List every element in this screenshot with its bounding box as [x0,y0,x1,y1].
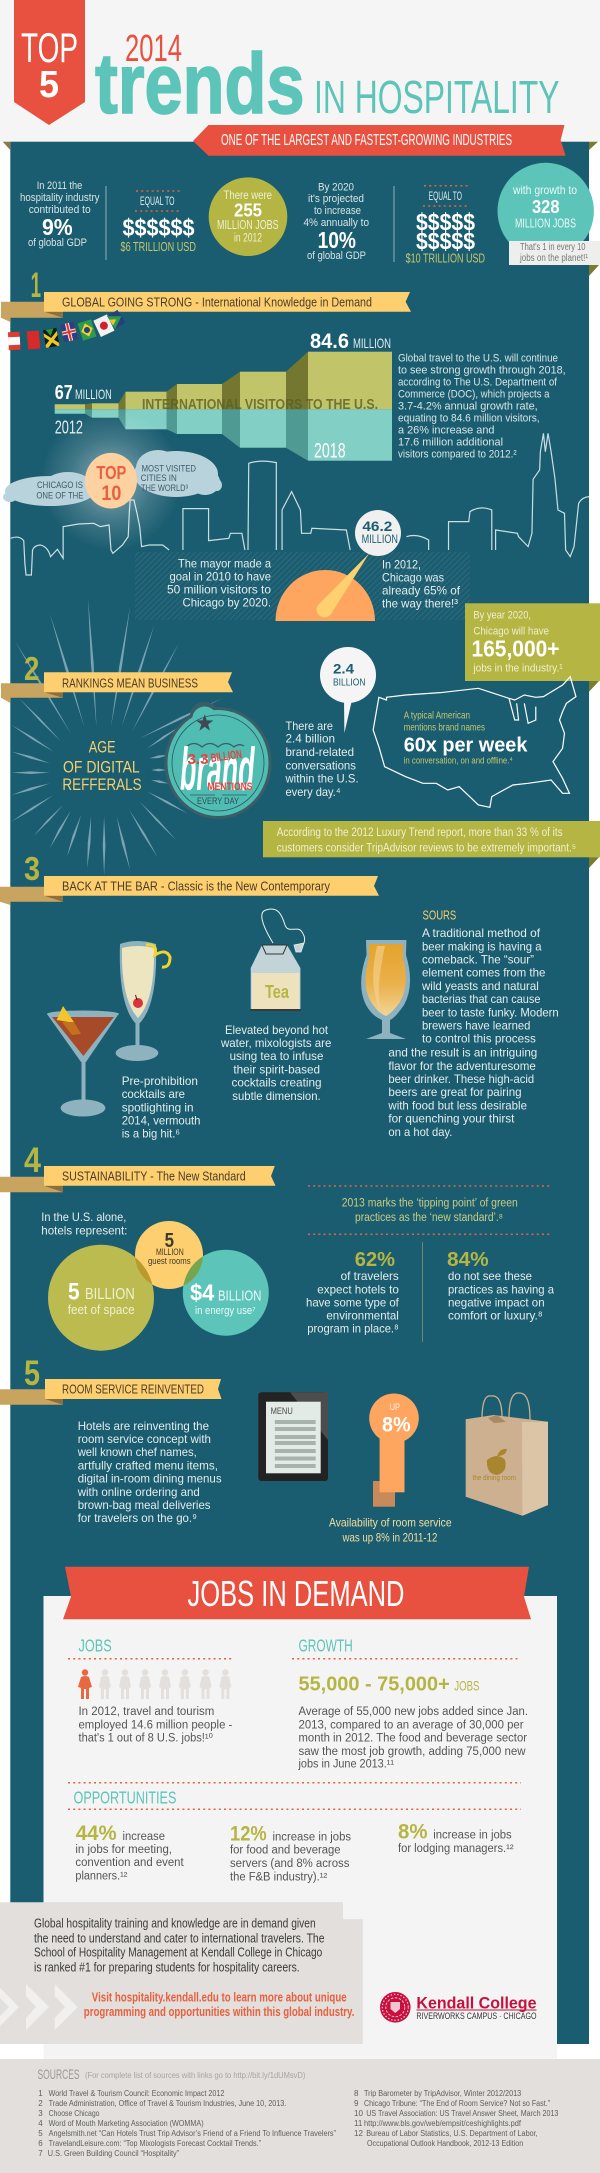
text block: room service [77,1419,222,1525]
text block: room service: Hotels are reinventing the [78,1419,209,1433]
text block: pre-prohibition cocktails: cocktails are [122,1087,185,1101]
sources list: right column: US Travel Association: US Travel Answer Sheet, March 2013 [366,2109,559,2118]
text block: global travel: Global travel to the U.S. will continue [398,353,558,365]
sources list: right column: 10 [354,2109,363,2118]
venn circles: hotel footprint: feet of space [68,1303,135,1317]
stat circle: 255 million jobs: MILLION JOBS [217,218,279,232]
text block: tea: cocktails creating [232,1076,322,1090]
stat: 62 percent [306,1249,399,1336]
text block: tea: water, mixologists are [220,1036,332,1050]
stat: 44 percent: convention and event [75,1857,184,1869]
stat: 9 percent of global GDP: 9% [42,214,73,240]
icon: people row, 1 of 8 [78,1669,231,1699]
callout: 165,000 jobs: jobs in the industry.¹ [472,663,563,675]
stat: 10 trillion USD: EQUAL TO [429,189,462,203]
badge: 3.3 billion brand mentions: EVERY DAY [197,796,239,806]
section 4 heading ribbon: 4 [24,1141,41,1180]
text block: tea: their spirit-based [233,1062,320,1076]
section 2 heading ribbon [1,650,233,703]
section 5 heading ribbon: 5 [24,1354,40,1393]
chart: international visitors to the U.S.: 84.6 [310,330,349,353]
text block: brand conversations: brand-related [286,745,354,759]
venn circles: hotel footprint [48,1221,269,1351]
sources list: left column: Angelsmith.net “Can Hotels Trust Trip Advisor’s Friend of a Friend To Influence Travelers” [49,2129,336,2138]
panel: growth: Average of 55,000 new jobs added since Jan. [298,1706,528,1718]
callout: 165,000 jobs [465,603,600,692]
text block: sours: beers are great for pairing [388,1085,522,1099]
stat circle: 255 million jobs [209,177,287,256]
text block: brand conversations [285,719,359,799]
text block: pre-prohibition cocktails: 2014, vermouth [122,1114,200,1128]
text block: room service: brown-bag meal deliveries [78,1498,210,1512]
callout: Chicago top 10 cities: CITIES IN [141,473,177,483]
badge: 3.3 billion brand mentions: MENTIONS [208,781,252,793]
text block: sours: flavor for the adventuresome [388,1059,536,1073]
venn circles: hotel footprint: 5 [68,1278,80,1305]
gauge: 46.2 million visitors: 46.2 [362,519,392,534]
text: availability of room service: was up 8% in 2011-12 [342,1531,438,1545]
stat: 44 percent [75,1822,184,1882]
stat: 62 percent: environmental [326,1309,399,1323]
callout: tipping point of green practices [308,1186,551,1234]
stat: 12 percent: for food and beverage [230,1845,341,1857]
icon: tea bag [250,909,305,1011]
stat: 12 percent [230,1823,351,1883]
panel: opportunities [68,1783,521,1883]
stat: 84 percent: comfort or luxury.⁸ [448,1309,543,1323]
section 1 heading ribbon: 1 [31,266,41,305]
callout: tipping point of green practices: practices as the ‘new standard’.⁸ [355,1212,503,1224]
text block: pre-prohibition cocktails: Pre-prohibition [122,1074,198,1088]
sources list: left column: 6 [38,2139,43,2148]
text block: mayor goal: 50 million visitors to [167,583,271,597]
badge: 3.3 billion brand mentions: brand [180,736,255,803]
stat: 84 percent: 84% [447,1249,489,1271]
sources list: right column: 9 [354,2099,359,2108]
panel: sources: SOURCES [38,2066,80,2082]
text block: brand conversations: every day.⁴ [286,785,341,799]
panel: growth: 55,000 - 75,000+ [298,1674,450,1696]
stat: 8 percent: increase in jobs [433,1829,512,1841]
text block: hotels represent: hotels represent: [41,1223,127,1237]
icon: tablet menu: MENU [271,1406,293,1417]
icon: key tag up 8 percent [369,1394,419,1507]
callout: 60x per week: 60x per week [404,735,528,757]
section 2 heading ribbon: 2 [24,650,39,687]
stat: 62 percent: expect hotels to [317,1282,399,1296]
text block: sours: beer drinker. These high-acid [388,1072,534,1086]
stat: 10 trillion USD: $10 TRILLION USD [406,252,485,266]
text block: global travel: Commerce (DOC), which projects a [398,389,550,401]
text block: mayor goal [167,557,271,610]
panel: jobs: JOBS [78,1636,112,1656]
stat: 84 percent: practices as having a [448,1282,554,1296]
text block: room service: artfully crafted menu items, [78,1458,218,1472]
title [95,28,560,132]
section 3 heading ribbon [0,850,379,905]
icon: champagne flute [116,941,170,1061]
fold triangles [3,142,598,150]
text: availability of room service: Availability of room service [329,1516,452,1530]
stat: 9 percent of global GDP: of global GDP [28,237,87,249]
stat: 44 percent: 44% [76,1822,117,1845]
stat circle: 328 million jobs: with growth to [512,183,577,197]
stat: 6 trillion USD [120,191,196,254]
callout: Chicago top 10 cities: CHICAGO IS [37,480,83,490]
text block: global travel: according to The U.S. Department of [398,377,558,389]
stat: 44 percent: planners.¹² [75,1870,128,1882]
callout: Chicago top 10 cities [3,410,222,550]
stat: 10 trillion USD [406,186,485,266]
chart: international visitors to the U.S.: MILLION [75,386,112,402]
callout: Chicago top 10 cities: MOST VISITED [142,464,196,474]
header ribbon: top 5: TOP [21,24,78,71]
icon: flags [8,310,125,350]
icon: tablet menu [258,1392,328,1481]
text block: global travel: to see strong growth through 2018, [398,365,566,377]
text block: sours: element comes from the [422,966,546,980]
chart: international visitors to the U.S.: 2012 [55,416,83,437]
stat: 84 percent: negative impact on [448,1296,545,1310]
sources list: right column: 8 [354,2089,359,2098]
text block: global travel: equating to 84.6 million visitors, [398,413,540,425]
panel: growth: month in 2012. The food and beverage sector [298,1733,527,1745]
icon: key tag up 8 percent: 8% [382,1414,411,1437]
section 2 heading ribbon: RANKINGS MEAN BUSINESS [62,676,198,691]
text block: sours: comeback. The “sour” [422,952,534,966]
text block: tea: Elevated beyond hot [225,1023,329,1037]
map: United States outline [373,677,576,807]
sources list: left column: Word of Mouth Marketing Association (WOMMA) [49,2119,204,2128]
stat circle: 328 million jobs: MILLION JOBS [515,217,576,231]
text block: sours: to control this process [422,1032,536,1046]
sources list: right column: Chicago Tribune: “The End of Room Service? Not so Fast.” [364,2099,550,2108]
text block: 65 percent of the way: In 2012, [382,557,421,571]
banner: jobs in demand [63,1567,531,1619]
gauge: 46.2 million visitors [276,510,401,621]
stat: 12 percent: servers (and 8% across [230,1858,350,1870]
text block: global travel [398,353,566,461]
panel: sources [0,2059,600,2173]
text block: brand conversations: within the U.S. [285,772,359,786]
stat: 10 percent of global GDP: By 2020 [318,181,354,193]
text block: room service: with online ordering and [77,1485,200,1499]
callout: Chicago top 10 cities: TOP [96,462,126,483]
callout: 60x per week: in conversation, on and offline.⁴ [404,755,513,766]
text block: 65 percent of the way: already 65% of [382,583,461,597]
icon: beer glass [361,940,410,1039]
text block: room service: room service concept with [78,1432,211,1446]
sources list: left column: 7 [38,2149,43,2158]
stat: 10 percent of global GDP: it's projected [308,193,364,205]
stat: 12 percent: 12% [230,1823,267,1846]
skyline illustration [11,433,589,575]
stat circle: 255 million jobs: There were [224,188,272,202]
panel: growth [292,1636,528,1771]
text block: pre-prohibition cocktails: spotlighting in [122,1100,194,1114]
panel: growth: JOBS [454,1678,480,1694]
panel: growth: GROWTH [298,1636,353,1656]
section 3 heading ribbon: 3 [24,850,40,887]
venn circles: hotel footprint: $4 [190,1280,214,1306]
venn circles: hotel footprint: BILLION [218,1288,261,1305]
card: jobs in demand background [44,1596,557,2059]
text block: 65 percent of the way: the way there!³ [382,597,458,611]
panel: Kendall College call to action: programming and opportunities within this global industry. [84,2005,354,2019]
hatch band [135,552,470,620]
heading: age of digital referrals [62,738,142,794]
panel: sources: (For complete list of sources with links go to http://bit.ly/1dUMsvD) [85,2070,306,2080]
panel: growth: saw the most job growth, adding 75,000 new [298,1746,526,1758]
stat: 62 percent: of travelers [341,1269,399,1283]
text: availability of room service [329,1516,452,1545]
stat: 10 trillion USD: $$$$$ [416,228,476,255]
badge: 3.3 billion brand mentions: 3.3 [188,751,208,768]
callout: tipping point of green practices: 2013 marks the ‘tipping point’ of green [342,1198,518,1210]
stat circle: 255 million jobs: 255 [234,200,262,221]
stat: 10 percent of global GDP [304,181,369,262]
panel: jobs: that's 1 out of 8 U.S. jobs!¹⁰ [78,1733,213,1745]
logo: Kendall College: RIVERWORKS CAMPUS · CHICAGO [416,2011,536,2021]
text block: global travel: 17.6 million additional [398,437,503,449]
sunburst rays [11,598,222,875]
text block: sours [387,907,559,1139]
panel: jobs: In 2012, travel and tourism [78,1706,214,1718]
stat: 9 percent of global GDP: contributed to [29,204,91,216]
icon: key tag up 8 percent: UP [390,1402,400,1413]
text block: sours: beer making is having a [422,939,542,953]
text block: global travel: a 26% increase and [398,425,494,437]
bubble: 2.4 billion: 2.4 [333,660,354,676]
icon: tea bag: Tea [265,982,290,1002]
sources list: left column: Choose Chicago [49,2109,100,2118]
text block: tea: using tea to infuse [230,1049,324,1063]
callout: 165,000 jobs: 165,000+ [472,636,560,662]
stat circle: 255 million jobs: in 2012 [234,233,262,245]
stat: 62 percent: program in place.⁸ [307,1322,399,1336]
sources list: right column [354,2089,559,2148]
text block: mayor goal: goal in 2010 to have [170,570,271,584]
stat: 12 percent: the F&B industry).¹² [230,1871,327,1883]
stat: 10 percent of global GDP: to increase [314,205,361,217]
sources list: left column: Trade Administration, Office of Travel & Tourism Industries, June 10, 2013. [49,2099,286,2108]
panel: Kendall College call to action: Global hospitality training and knowledge are in demand given [34,1917,316,1931]
banner: jobs in demand: JOBS IN DEMAND [188,1573,404,1614]
text block: tea: subtle dimension. [232,1089,321,1103]
panel: Kendall College call to action: Visit hospitality.kendall.edu to learn more about unique [92,1991,347,2005]
stat: 9 percent of global GDP [20,180,100,249]
text block: hotels represent [41,1210,127,1237]
badge: 3.3 billion brand mentions: BILLION [210,747,243,765]
text block: sours: wild yeasts and natural [421,979,539,993]
callout: TripAdvisor reviews: According to the 2012 Luxury Trend report, more than 33 % of its [277,827,563,839]
section 5 heading ribbon [0,1354,222,1405]
chart: international visitors to the U.S.: 2018 [314,440,346,463]
stat: 6 trillion USD: $6 TRILLION USD [120,240,196,254]
text block: sours: on a hot day. [388,1125,452,1139]
icon: paper bag [466,1393,548,1516]
sources list: left column: 1 [38,2089,43,2098]
stat: 44 percent: in jobs for meeting, [75,1844,172,1856]
panel: Kendall College call to action: is ranked #1 for preparing students for hospitality careers. [34,1960,300,1974]
text block: sours: SOURS [422,907,456,922]
subtitle banner [193,125,566,156]
panel: opportunities: OPPORTUNITIES [74,1787,176,1807]
text block: tea [220,1023,332,1103]
heading: age of digital referrals: OF DIGITAL [63,757,140,776]
text block: pre-prohibition cocktails [122,1074,200,1141]
stat: 9 percent of global GDP: hospitality industry [20,192,100,204]
stat circle: 328 million jobs: 328 [532,196,560,217]
logo: Kendall College: Kendall College [416,1994,536,2012]
sources list: left column: 3 [38,2109,43,2118]
panel: jobs: employed 14.6 million people - [78,1719,232,1731]
text block: sours: A traditional method of [422,926,541,940]
panel: Kendall College call to action: School of Hospitality Management at Kendall College in Chicago [34,1946,322,1960]
sources list: right column: 11 [354,2119,363,2128]
stat: 10 percent of global GDP: 10% [318,227,356,253]
text block: sours: bacterias that can cause [422,992,541,1006]
sources list: left column: TravelandLeisure.com: “Top Mixologists Forecast Cocktail Trends.” [49,2139,261,2148]
callout: 165,000 jobs: By year 2020, [473,609,531,621]
callout: Chicago top 10 cities: 10 [101,482,121,505]
stat: 12 percent: increase in jobs [272,1832,351,1844]
text block: brand conversations: 2.4 billion [286,732,335,746]
stat: 8 percent: for lodging managers.¹² [398,1843,514,1855]
sources list: left column: U.S. Green Building Council “Hospitality” [48,2149,179,2158]
bubble: 2.4 billion: BILLION [333,677,366,689]
stat: 10 percent of global GDP: of global GDP [307,250,366,262]
chart: international visitors to the U.S.: 67 [55,382,73,404]
text block: sours: beer to taste funky. Modern [422,1005,559,1019]
panel: Kendall College call to action: the need to understand and cater to international travelers. The [34,1931,325,1945]
section 5 heading ribbon: ROOM SERVICE REINVENTED [62,1381,204,1396]
sources list: right column: Trip Barometer by TripAdvisor, Winter 2012/2013 [364,2089,522,2098]
panel: growth: jobs in June 2013.¹¹ [298,1759,394,1771]
sources list: right column: Occupational Outlook Handbook, 2012-13 Edition [367,2139,523,2148]
callout: 60x per week: A typical American [404,711,470,722]
stat: 8 percent [398,1820,514,1855]
chart: international visitors to the U.S.: INTERNATIONAL VISITORS TO THE U.S. [142,397,378,413]
header ribbon: top 5 [14,0,85,125]
sources list: left column: 5 [38,2129,43,2138]
logo: Kendall College [380,1992,536,2023]
callout: Chicago top 10 cities: ONE OF THE [36,490,83,500]
sources list: right column: Bureau of Labor Statistics, U.S. Department of Labor, [366,2129,538,2138]
stat: 84 percent: do not see these [448,1269,532,1283]
text block: sours: for quenching your thirst [388,1112,515,1126]
sources list: right column: http://www.bls.gov/web/empsit/ceshighlights.pdf [364,2119,522,2128]
stat: 62 percent: have some type of [306,1296,399,1310]
text block: sours: brewers have learned [422,1018,530,1032]
stat: 62 percent: 62% [355,1249,395,1271]
text block: sours: with food but less desirable [387,1098,527,1112]
icon: paper bag: the dining room [473,1473,516,1482]
callout: 165,000 jobs: Chicago will have [473,625,549,637]
stat: 6 trillion USD: $$$$$$ [122,214,195,242]
text block: room service: for travelers on the go.⁹ [78,1511,197,1525]
stat: 44 percent: increase [122,1831,165,1843]
chart: international visitors to the U.S.: MILLION [353,335,391,351]
text block: sours: and the result is an intriguing [388,1046,537,1060]
panel: growth: 2013, compared to an average of 30,000 per [298,1719,524,1731]
stat: 6 trillion USD: EQUAL TO [140,194,174,208]
stat: 10 trillion USD: $$$$$ [416,209,476,236]
header ribbon: top 5: 5 [39,64,59,106]
section 4 heading ribbon: SUSTAINABILITY - The New Standard [62,1169,246,1184]
section 3 heading ribbon: BACK AT THE BAR - Classic is the New Contemporary [62,879,330,894]
stat: 8 percent: 8% [398,1820,428,1843]
text block: global travel: 3.7-4.2% annual growth rate, [398,401,538,413]
bubble: 2.4 billion [320,647,376,733]
venn circles: hotel footprint: 5 [165,1230,174,1252]
callout: 60x per week [404,711,528,766]
title: 2014 [125,28,182,70]
section 1 heading ribbon [1,266,411,322]
venn circles: hotel footprint: BILLION [85,1286,135,1303]
callout: TripAdvisor reviews [263,821,600,868]
text block: brand conversations: There are [286,719,333,733]
text block: room service: well known chef names, [77,1445,197,1459]
chart: international visitors to the U.S. [55,330,392,463]
panel: jobs [68,1636,233,1745]
text block: global travel: visitors compared to 2012.² [398,449,517,461]
text block: 65 percent of the way [382,557,461,611]
stat: 9 percent of global GDP: In 2011 the [37,180,82,192]
stat circle: 328 million jobs [498,163,600,276]
sources list: left column: World Travel & Tourism Council: Economic Impact 2012 [49,2089,225,2098]
stat: 84 percent [447,1249,554,1323]
sources list: left column: 4 [38,2119,43,2128]
heading: age of digital referrals: AGE [89,738,116,757]
title: trends [95,37,304,132]
callout: 60x per week: mentions brand names [404,723,485,734]
heading: age of digital referrals: REFFERALS [62,775,142,794]
sources list: left column: 2 [38,2099,43,2108]
sources list: right column: 12 [354,2129,363,2138]
text block: brand conversations: conversations [286,758,356,772]
text block: hotels represent: In the U.S. alone, [41,1210,126,1224]
icon: martini glass [47,1006,119,1116]
text block: mayor goal: The mayor made a [178,557,271,571]
section 4 heading ribbon [0,1141,276,1192]
venn circles: hotel footprint: guest rooms [148,1256,191,1266]
text block: room service: digital in-room dining menus [78,1472,222,1486]
text block: mayor goal: Chicago by 2020. [182,596,271,610]
section 1 heading ribbon: GLOBAL GOING STRONG - International Knowledge in Demand [62,295,372,310]
icon: chevrons [0,1984,78,2030]
badge: 3.3 billion brand mentions [164,702,272,819]
venn circles: hotel footprint: MILLION [156,1247,184,1257]
gauge: 46.2 million visitors: MILLION [362,533,398,546]
stat: 10 percent of global GDP: 4% annually to [304,217,369,229]
sources list: left column [38,2089,336,2158]
venn circles: hotel footprint: in energy use⁷ [195,1305,256,1317]
text block: 65 percent of the way: Chicago was [382,570,444,584]
text block: pre-prohibition cocktails: is a big hit.⁶ [122,1127,180,1141]
callout: Chicago top 10 cities: THE WORLD³ [141,483,188,493]
panel: Kendall College call to action [0,1902,363,2044]
